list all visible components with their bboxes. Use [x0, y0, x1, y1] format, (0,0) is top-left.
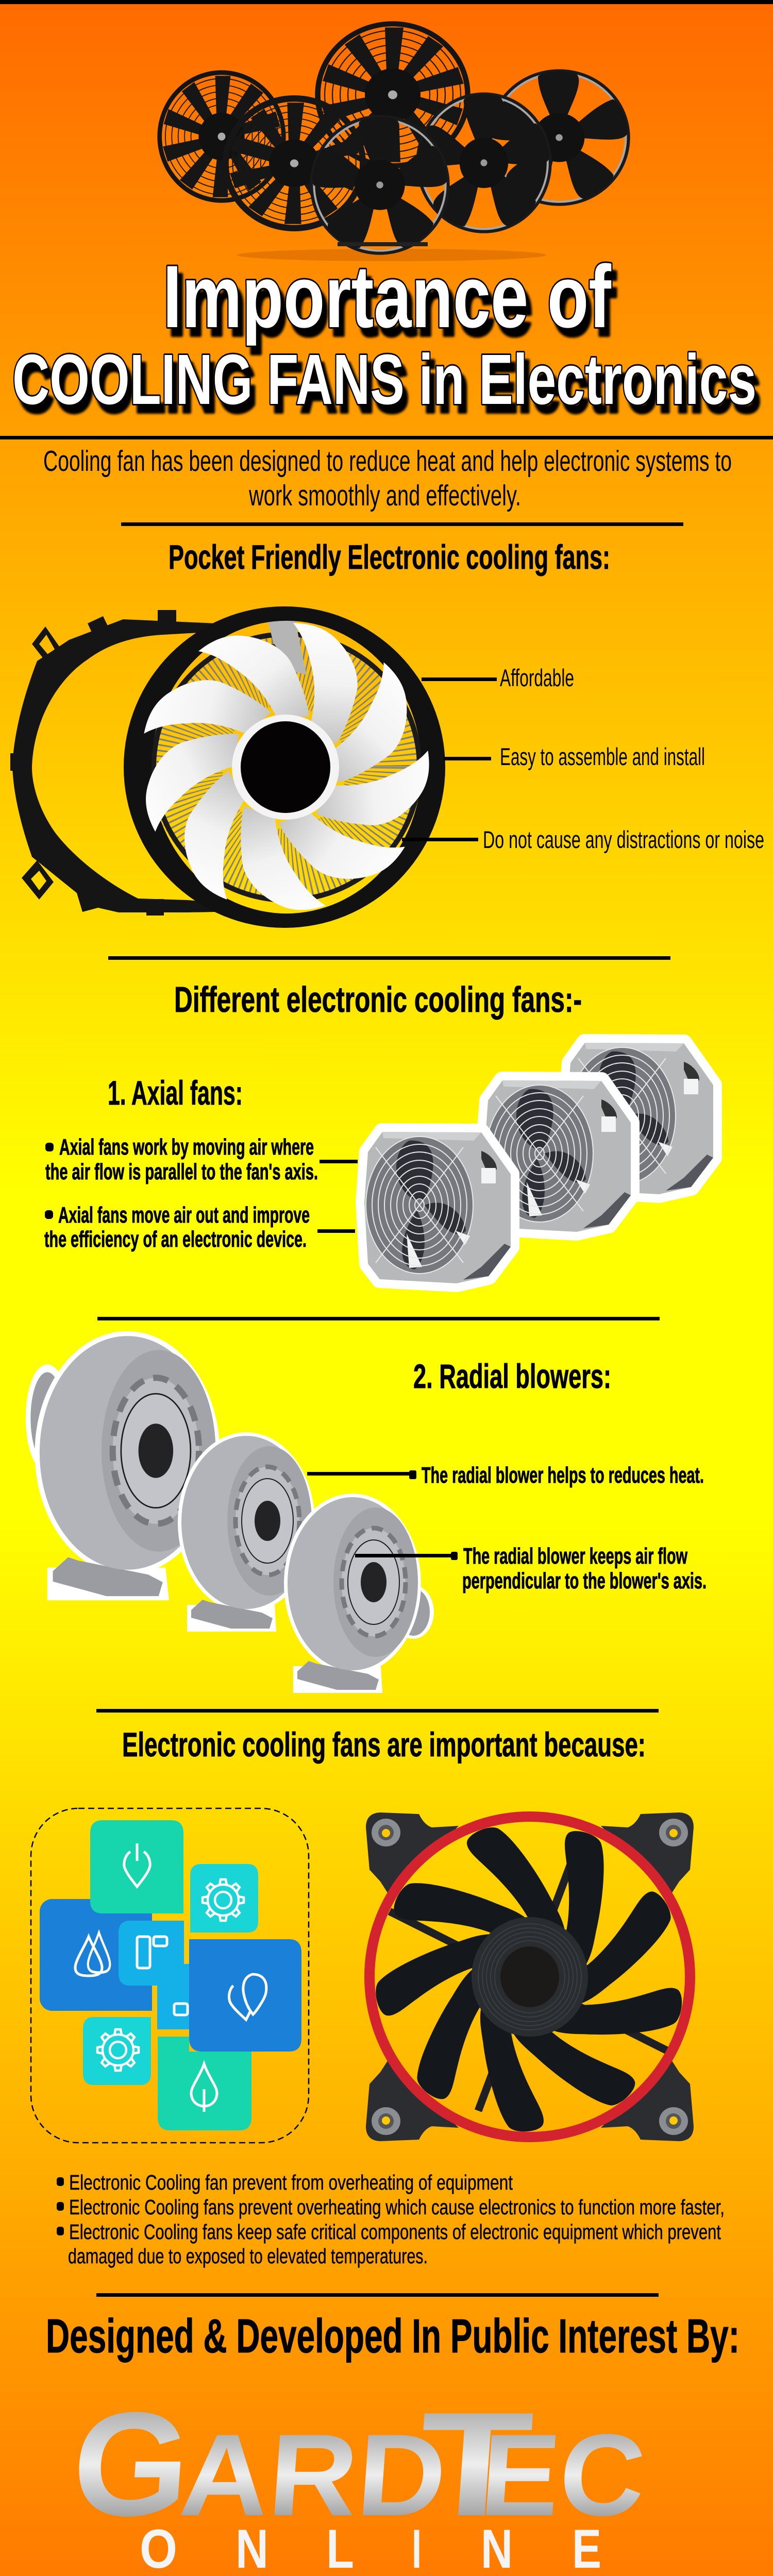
fan: second left — [225, 98, 363, 229]
card: green bottom — [158, 2037, 251, 2130]
frame corners — [366, 1812, 694, 2141]
card: light blue upper — [119, 1921, 184, 1986]
mounting bracket — [10, 610, 216, 916]
dashed frame — [31, 1808, 309, 2143]
logo wordmark: ARD — [176, 2410, 450, 2540]
radial blowers illustration — [29, 1331, 434, 1693]
logo tagline: online — [140, 2518, 601, 2576]
axial fans text: Axial fans move air out and improve — [58, 1202, 310, 1228]
fan: far left — [160, 73, 283, 200]
intro text: work smoothly and effectively. — [248, 479, 521, 512]
hub — [232, 715, 339, 820]
heading: axial fans: 1. Axial fans: — [108, 1074, 243, 1112]
heading: different fans: Different electronic cooling fans:- — [174, 979, 582, 1020]
callout: perpendicular airflow — [355, 1544, 707, 1594]
axial fans text — [44, 1134, 358, 1252]
title: Importance of — [163, 247, 612, 346]
callout: easy to assemble — [444, 743, 705, 770]
pocket friendly fan illustration — [10, 606, 445, 928]
fan: front — [309, 117, 450, 253]
white blades — [134, 611, 442, 920]
callout: affordable — [422, 664, 574, 691]
card: blue left — [40, 1899, 152, 2011]
card: light blue lower — [157, 1964, 227, 2029]
axial fans text: the efficiency of an electronic device. — [44, 1227, 307, 1252]
logo wordmark: EC — [477, 2410, 649, 2540]
hub — [472, 1917, 588, 2037]
top black bar — [0, 0, 773, 4]
axial fan: front — [364, 1132, 511, 1283]
intro text — [43, 445, 732, 512]
axial fans text: Axial fans work by moving air where — [59, 1134, 314, 1160]
blower: large — [29, 1331, 220, 1600]
blower: small — [284, 1494, 434, 1693]
title — [12, 247, 757, 419]
heatsink fins — [187, 669, 382, 865]
importance bullet list: Electronic Cooling fan prevent from overheating of equipment — [69, 2171, 513, 2194]
icon panel — [31, 1808, 309, 2143]
importance bullet list — [57, 2171, 725, 2268]
fan frame — [124, 606, 445, 928]
axial fan: middle — [484, 1080, 631, 1232]
logo wordmark: T — [413, 2381, 537, 2547]
importance bullet list: damaged due to exposed to elevated temperatures. — [68, 2244, 428, 2268]
axial fan: back — [567, 1043, 713, 1194]
red ring — [369, 1817, 690, 2137]
dark blades — [372, 1822, 691, 2139]
axial fans text: the air flow is parallel to the fan's axis. — [45, 1159, 318, 1184]
logo: GardTec Online — [68, 2381, 651, 2576]
logo wordmark — [68, 2381, 651, 2547]
fan: far right — [487, 71, 631, 204]
axial fans illustration — [364, 1043, 713, 1283]
title divider — [0, 436, 773, 439]
fan: large rear grille fan — [317, 24, 468, 166]
card: blue right — [189, 1939, 301, 2052]
blower: medium — [178, 1432, 315, 1632]
card: teal gear top — [190, 1864, 258, 1933]
hero image: group of six fans — [160, 24, 631, 261]
logo wordmark: G — [68, 2381, 195, 2547]
card: teal gear bottom — [83, 2017, 151, 2085]
callout: reduces heat — [307, 1463, 704, 1488]
card: green top — [90, 1820, 183, 1913]
callout: affordable: Affordable — [500, 664, 574, 691]
red ring fan — [366, 1812, 694, 2141]
fan: right middle — [415, 94, 552, 231]
heading: radial blowers: 2. Radial blowers: — [413, 1357, 611, 1395]
struts — [390, 1855, 674, 2111]
